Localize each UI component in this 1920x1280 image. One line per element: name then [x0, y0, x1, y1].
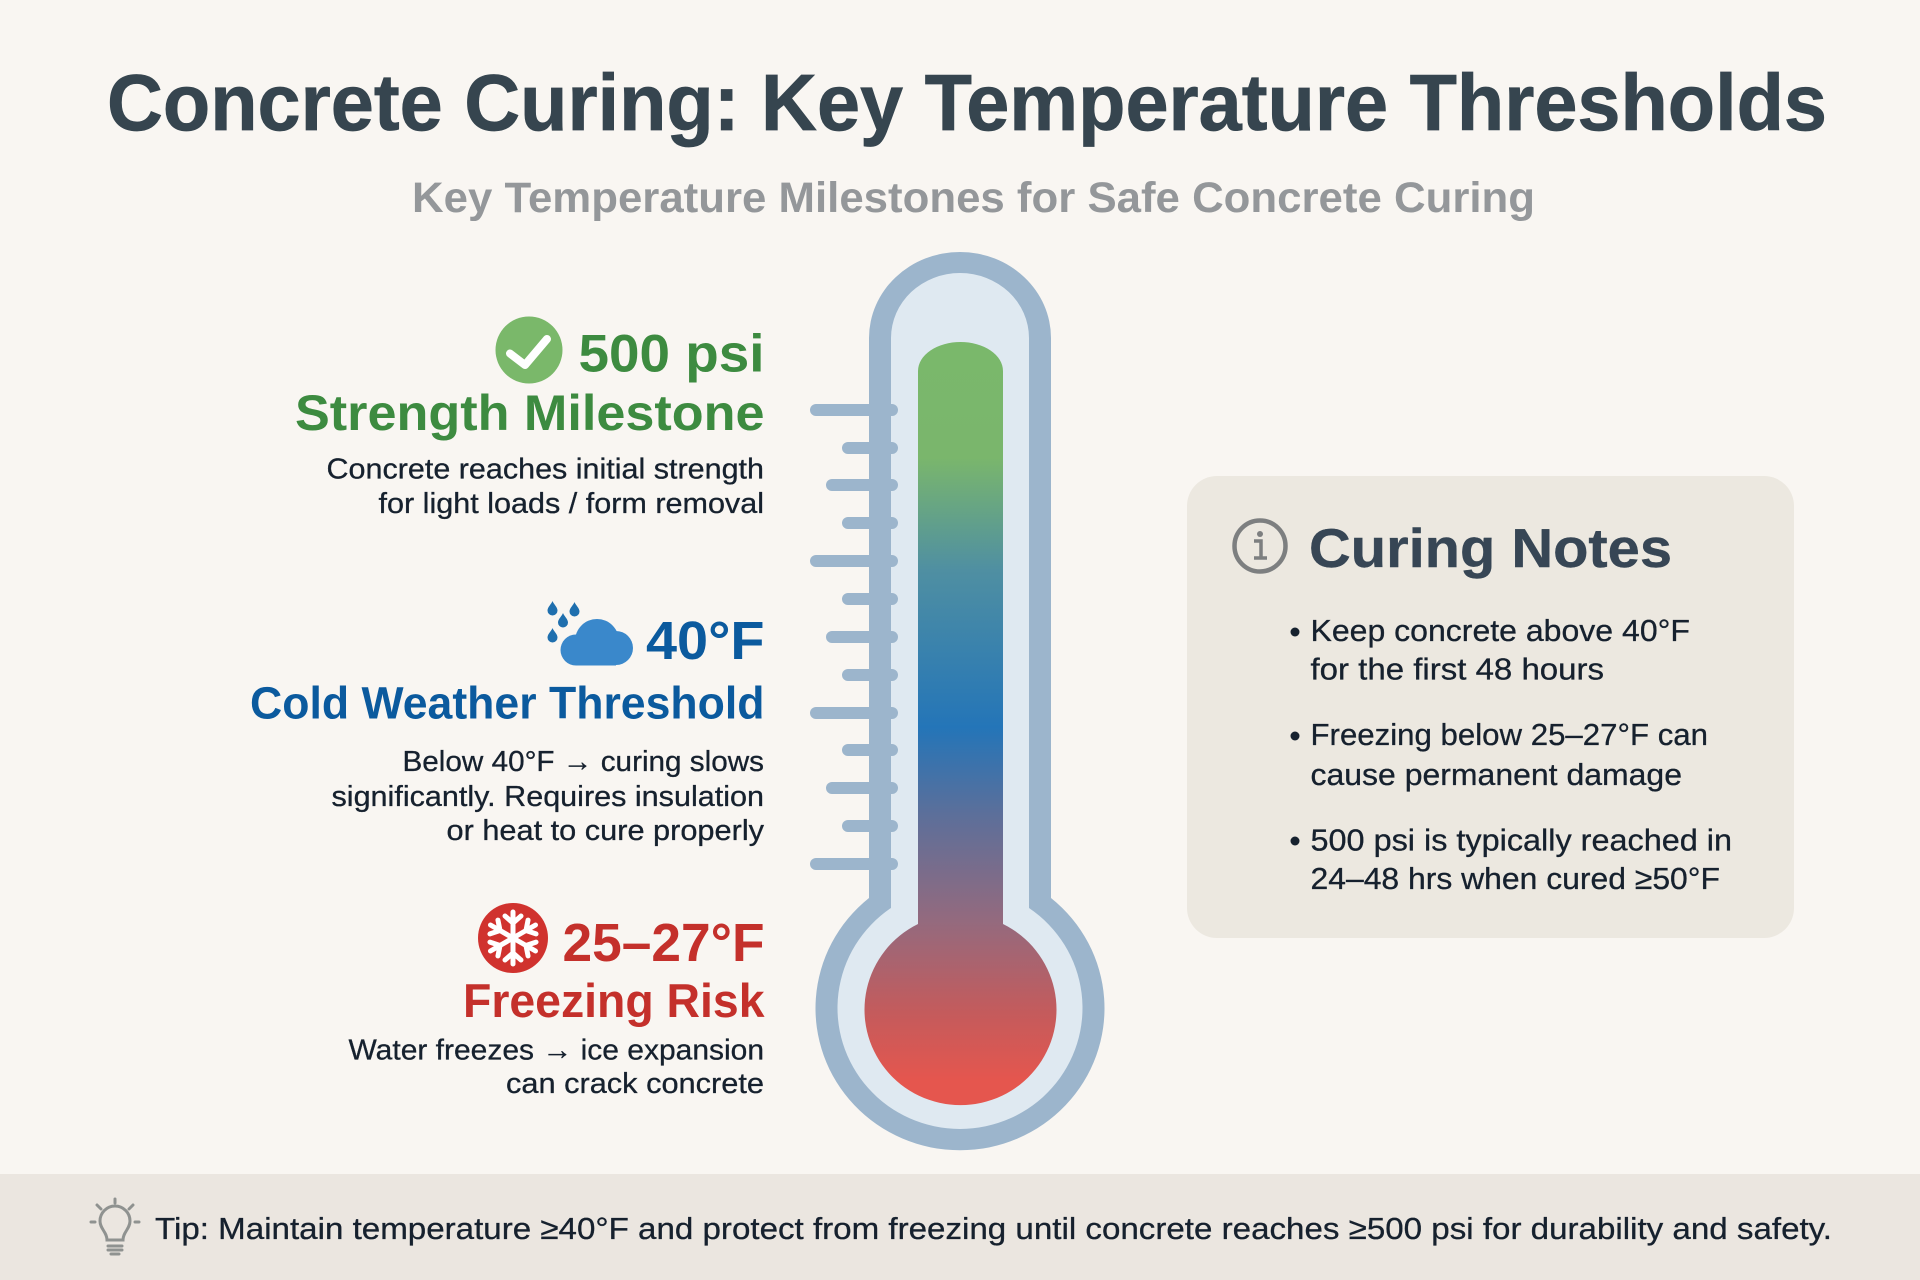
temperature scale ticks — [816, 410, 892, 864]
footer background — [0, 1174, 1920, 1280]
thermometer outer shell — [816, 252, 1105, 1150]
panel: curing notes — [1187, 476, 1794, 938]
value: 40°F: 40°F — [646, 611, 764, 671]
heading: strength milestone: Strength Milestone — [295, 385, 764, 441]
heading: freezing risk: Freezing Risk — [463, 974, 765, 1027]
note: keep above 40°F: for the first 48 hours — [1310, 652, 1604, 686]
note: 500 psi timing: 24–48 hrs when cured ≥50°F — [1310, 861, 1720, 896]
panel: 500 psi strength milestone — [295, 316, 764, 520]
note: freezing damage: Freezing below 25–27°F can — [1310, 717, 1708, 752]
icon: red snowflake circle — [478, 903, 548, 973]
value: 500 psi: 500 psi — [578, 324, 764, 384]
description: strength milestone: Concrete reaches initial strength — [326, 454, 764, 486]
description: cold weather threshold: or heat to cure properly — [446, 815, 765, 847]
icon: cloud with rain drops — [548, 601, 633, 666]
description: strength milestone: for light loads / form removal — [378, 488, 764, 520]
tip text: Tip: Maintain temperature ≥40°F and protect from freezing until concrete reaches ≥500 psi for durability and safety. — [155, 1211, 1832, 1246]
subtitle: Key Temperature Milestones for Safe Concrete Curing — [412, 174, 1535, 222]
thermometer inner glass — [838, 273, 1082, 1129]
value: 25–27°F: 25–27°F — [562, 913, 764, 973]
icon: light bulb — [91, 1199, 139, 1254]
footer tip bar — [0, 1174, 1920, 1280]
icon: info circle — [1234, 520, 1286, 572]
thermometer — [816, 252, 1105, 1150]
description: freezing risk: can crack concrete — [506, 1068, 764, 1100]
note: freezing damage — [1290, 717, 1708, 792]
description: cold weather threshold — [332, 746, 765, 847]
description: cold weather threshold: significantly. Requires insulation — [332, 781, 764, 813]
note: 500 psi timing — [1290, 822, 1732, 896]
note: freezing damage: cause permanent damage — [1310, 757, 1682, 792]
title: Concrete Curing: Key Temperature Thresholds — [107, 58, 1827, 147]
panel: 25–27°F freezing risk — [348, 903, 765, 1100]
heading: curing notes: Curing Notes — [1309, 517, 1672, 579]
description: freezing risk: Water freezes → ice expansion — [348, 1034, 764, 1066]
note: keep above 40°F — [1290, 613, 1690, 686]
heading: cold weather threshold: Cold Weather Threshold — [250, 678, 764, 728]
notes card background — [1187, 476, 1794, 938]
description: freezing risk — [348, 1034, 764, 1100]
note: keep above 40°F: Keep concrete above 40°F — [1310, 613, 1690, 648]
icon: green check circle — [496, 316, 562, 384]
description: strength milestone — [326, 454, 764, 520]
mercury gradient column and bulb — [864, 342, 1056, 1105]
panel: 40°F cold weather threshold — [250, 601, 765, 847]
description: cold weather threshold: Below 40°F → curing slows — [402, 746, 764, 778]
note: 500 psi timing: 500 psi is typically reached in — [1310, 822, 1732, 858]
